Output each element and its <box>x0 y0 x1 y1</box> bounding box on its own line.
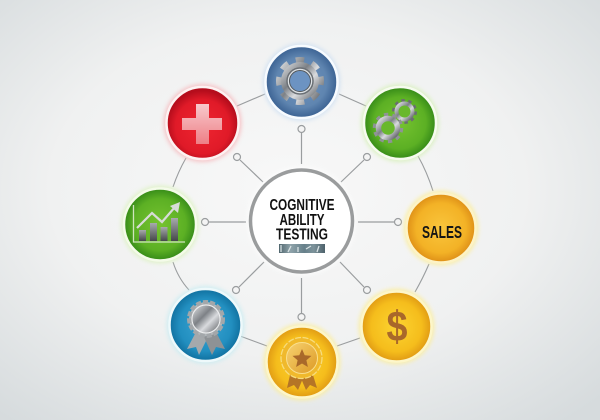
spoke: upper right <box>341 154 370 182</box>
node: growth chart <box>121 186 199 264</box>
icon: twin gears <box>374 100 416 142</box>
spoke: bottom <box>298 278 305 320</box>
sales label: SALES <box>422 222 462 242</box>
spoke: lower right <box>340 262 370 294</box>
central hub: TESTING <box>276 226 328 244</box>
node: dollar <box>358 288 434 364</box>
node: red cross <box>164 84 242 162</box>
spoke: lower left <box>232 262 264 294</box>
central hub: ABILITY <box>280 212 325 229</box>
outer ring connectors <box>173 94 433 346</box>
spoke: right <box>358 218 402 226</box>
icon: bar chart with arrow <box>134 202 185 242</box>
icon: large gear <box>275 56 325 106</box>
icon: star rosette <box>281 338 322 390</box>
hub title: COGNITIVE <box>270 197 334 214</box>
node: sales <box>404 190 478 266</box>
spoke: top <box>298 126 305 164</box>
node: gold star badge <box>264 324 340 400</box>
node: silver medal <box>166 286 244 364</box>
hub image strip <box>279 244 325 253</box>
node: green twin gears <box>361 84 439 162</box>
spoke connectors to the hub <box>202 126 402 320</box>
icon: medical cross <box>182 104 222 144</box>
node: blue gear <box>262 43 340 121</box>
icon: dollar sign: $ <box>386 303 408 351</box>
spoke: left <box>202 218 246 226</box>
central hub <box>248 167 356 275</box>
spoke: upper left <box>234 154 263 182</box>
icon: silver rosette <box>187 302 225 355</box>
